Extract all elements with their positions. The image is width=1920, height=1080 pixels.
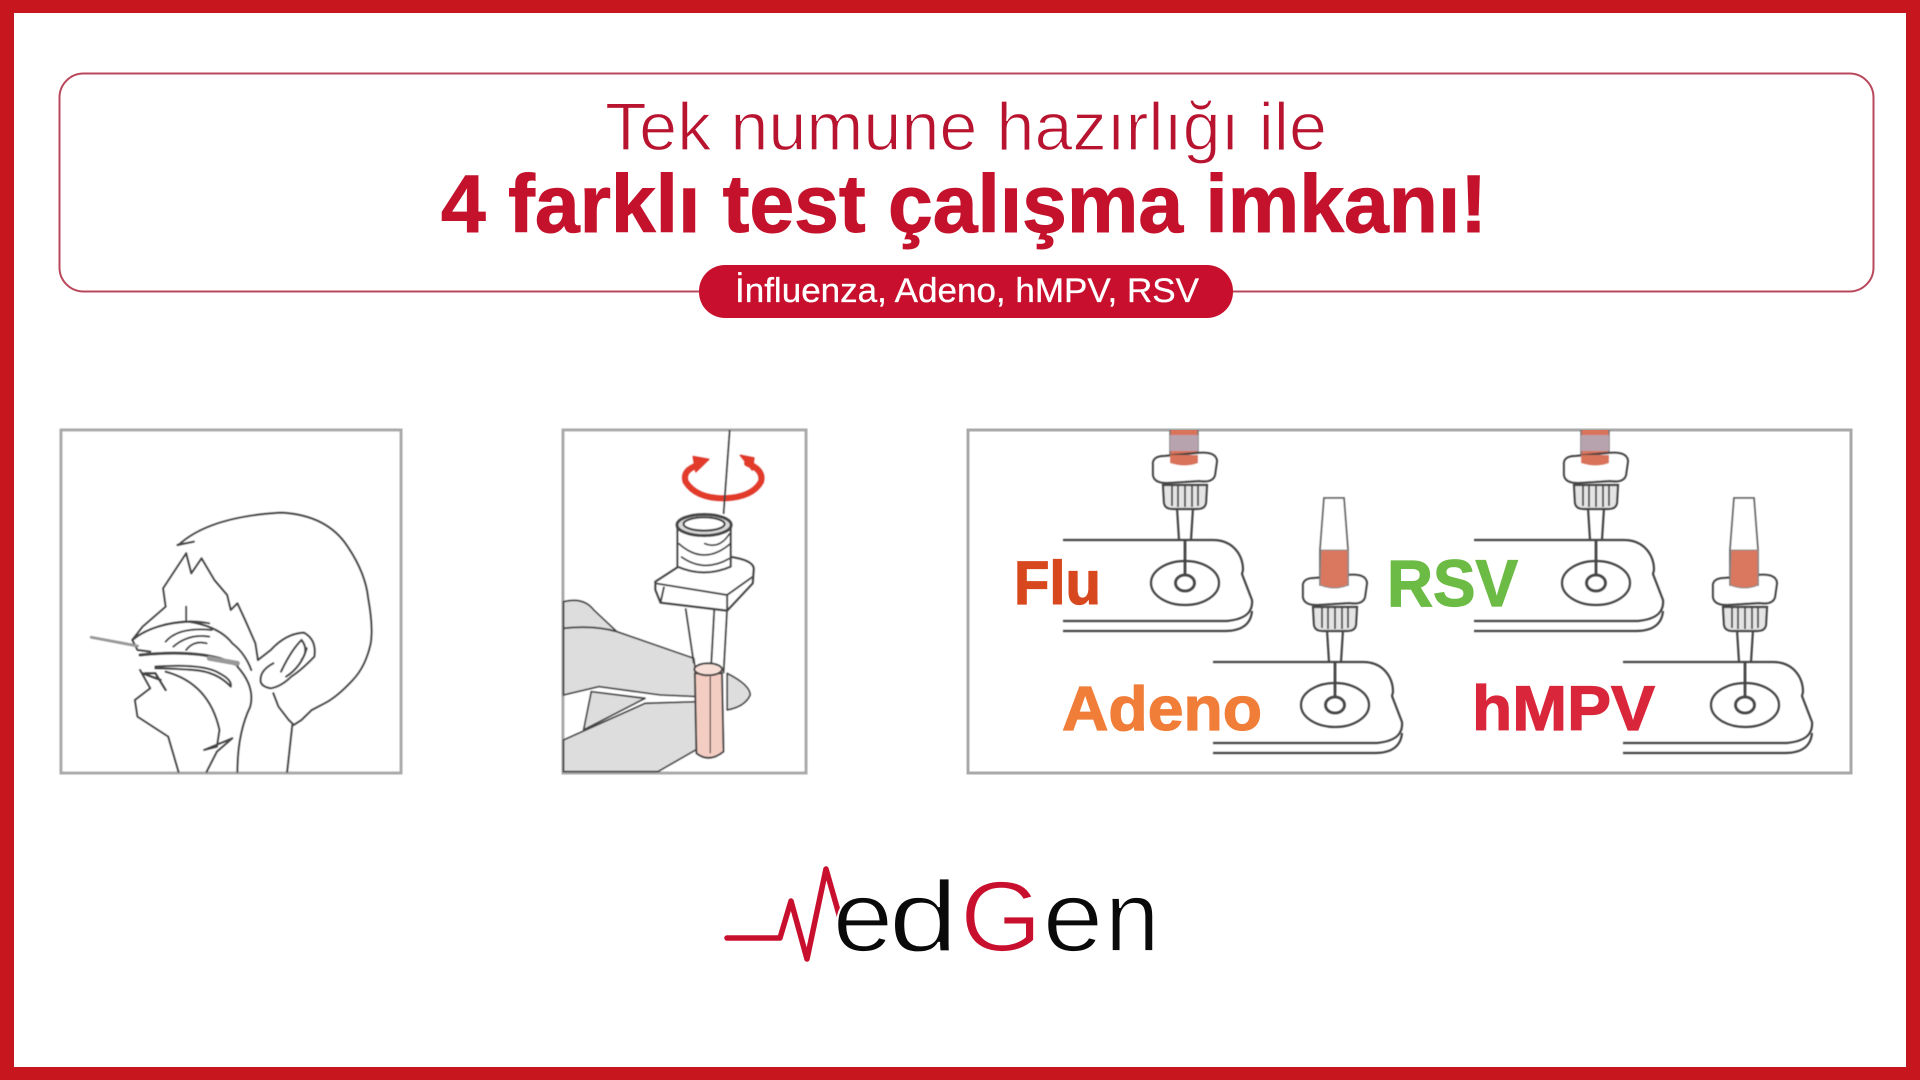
- panel: four test cartridges: [968, 418, 1851, 773]
- pill: test list: İnfluenza, Adeno, hMPV, RSV: [735, 272, 1199, 310]
- label: Flu: Flu: [1014, 549, 1101, 617]
- cartridge: hMPV: [1623, 498, 1812, 753]
- logo text: e: e: [833, 861, 893, 973]
- cartridge: Adeno: [1213, 498, 1402, 753]
- pill: test list: [699, 265, 1233, 318]
- header box: [60, 74, 1874, 292]
- panel: tube and swab illustration: [563, 430, 806, 773]
- label: RSV: RSV: [1387, 546, 1518, 620]
- cartridge: RSV: [1474, 418, 1663, 631]
- title line 2: 4 farklı test çalışma imkanı!: [441, 159, 1487, 250]
- label: Adeno: Adeno: [1062, 675, 1262, 744]
- label: hMPV: hMPV: [1472, 674, 1655, 744]
- logo text: n: n: [1105, 861, 1160, 973]
- logo: MedGen: [727, 861, 1160, 973]
- logo text: G: G: [960, 861, 1042, 973]
- icon: rotation arrow: [685, 455, 761, 498]
- panel: nasal swab illustration: [61, 430, 401, 773]
- logo text: e: e: [1043, 861, 1103, 973]
- icon: head profile with swab: [91, 513, 372, 772]
- cartridge: Flu: [1063, 418, 1252, 631]
- icon: swab stick: [724, 430, 730, 514]
- title line 1: Tek numune hazırlığı ile: [605, 89, 1327, 165]
- icon: gloved hand: [564, 600, 750, 772]
- logo text: d: d: [889, 861, 958, 973]
- header panel: [60, 74, 1874, 318]
- logo pulse line: [727, 869, 840, 959]
- icon: collection tube: [655, 514, 754, 758]
